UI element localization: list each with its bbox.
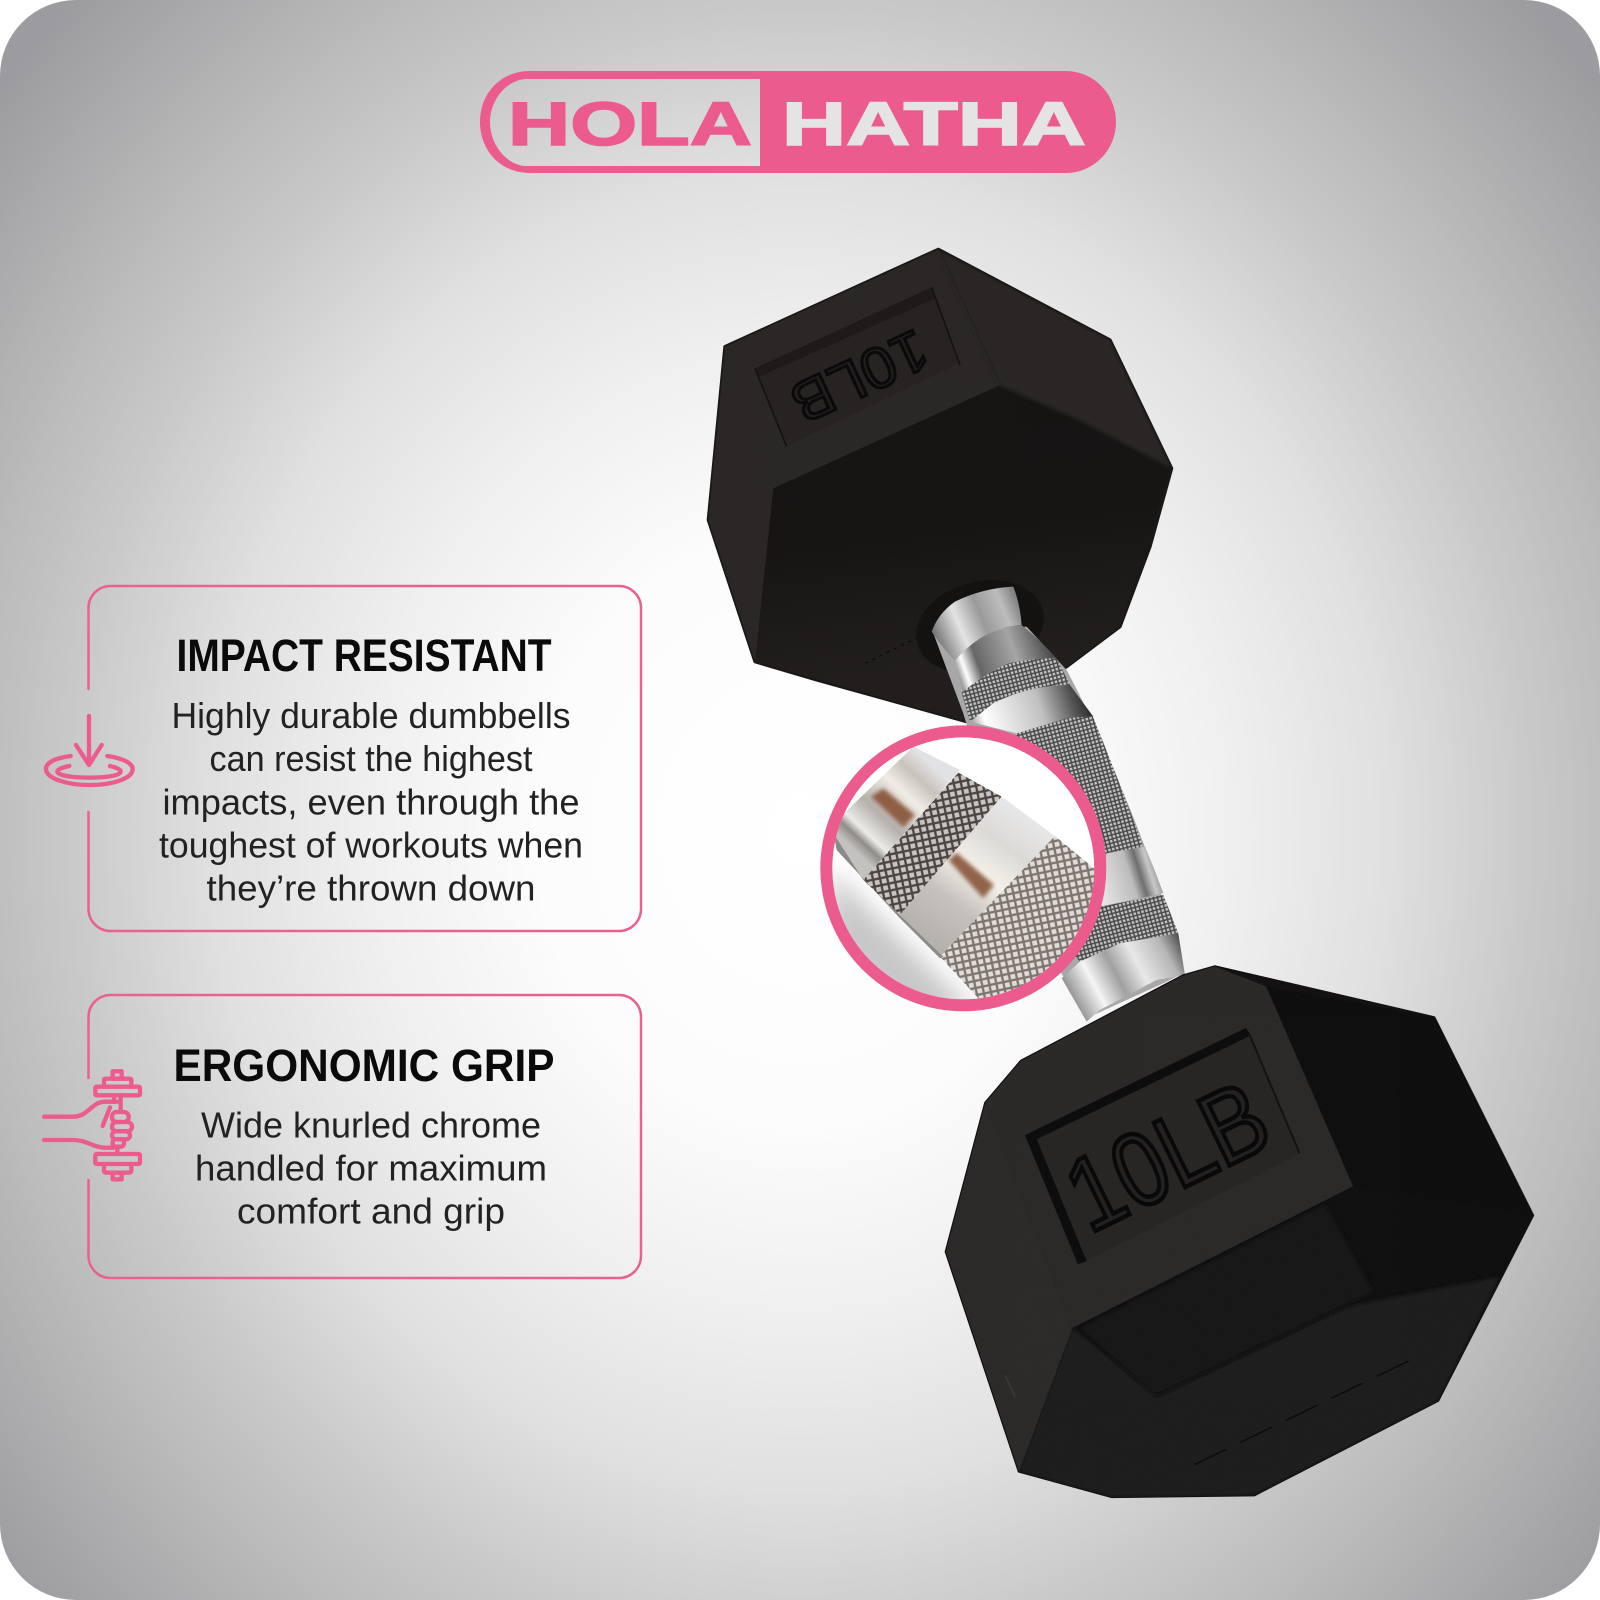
text block: grip description <box>195 1104 547 1232</box>
logo: Hola Hatha: HOLA <box>508 90 752 158</box>
icon: hand gripping dumbbell <box>44 1071 140 1179</box>
text block: impact description: toughest of workouts when <box>159 824 583 866</box>
chrome section <box>900 797 1055 957</box>
panel: ergonomic grip <box>44 995 641 1278</box>
text block: impact description: they’re thrown down <box>206 868 536 908</box>
knurl band one <box>962 658 1070 722</box>
text block: impact description: can resist the highest <box>210 738 532 779</box>
knurl ring one <box>863 773 1002 915</box>
text block: grip description: Wide knurled chrome <box>201 1104 541 1146</box>
embossed label: 10LB: 10LB <box>1049 1059 1286 1255</box>
lens ring <box>826 731 1100 1005</box>
weight label recess <box>755 287 960 447</box>
heading: ergonomic grip: ERGONOMIC GRIP <box>174 1040 554 1091</box>
copper reflection <box>871 788 915 827</box>
neck <box>955 625 1057 693</box>
callout: handle close-up lens <box>826 731 1120 1017</box>
upper collar <box>932 587 1022 661</box>
logo: Hola Hatha <box>480 71 1116 173</box>
lower chrome <box>1100 847 1163 907</box>
chrome knurled handle <box>906 566 1185 1022</box>
knurl band two <box>1000 716 1143 870</box>
heading: impact resistant: IMPACT RESISTANT <box>176 630 552 681</box>
dumbbell illustration <box>690 230 1550 1520</box>
text block: impact description: impacts, even through the <box>162 782 580 822</box>
icon: arrow striking ground <box>46 716 133 785</box>
mid chrome <box>970 685 1093 733</box>
panel: impact resistant <box>46 586 641 931</box>
text block: impact description <box>159 695 583 908</box>
logo: Hola Hatha: HATHA <box>782 90 1086 158</box>
text block: grip description: comfort and grip <box>237 1190 505 1232</box>
knurl ring two <box>941 836 1094 998</box>
lower hexagonal head <box>944 965 1534 1498</box>
lower collar <box>1062 933 1185 1022</box>
rubber texture <box>1099 1022 1484 1351</box>
copper reflection <box>948 853 994 898</box>
embossed label: 10LB: 10LB <box>781 316 938 435</box>
weight label recess <box>1031 1032 1300 1263</box>
knurl band three <box>1067 895 1178 962</box>
text block: impact description: Highly durable dumbbells <box>172 695 570 736</box>
upper hexagonal head <box>690 230 1190 722</box>
text block: grip description: handled for maximum <box>195 1148 547 1188</box>
